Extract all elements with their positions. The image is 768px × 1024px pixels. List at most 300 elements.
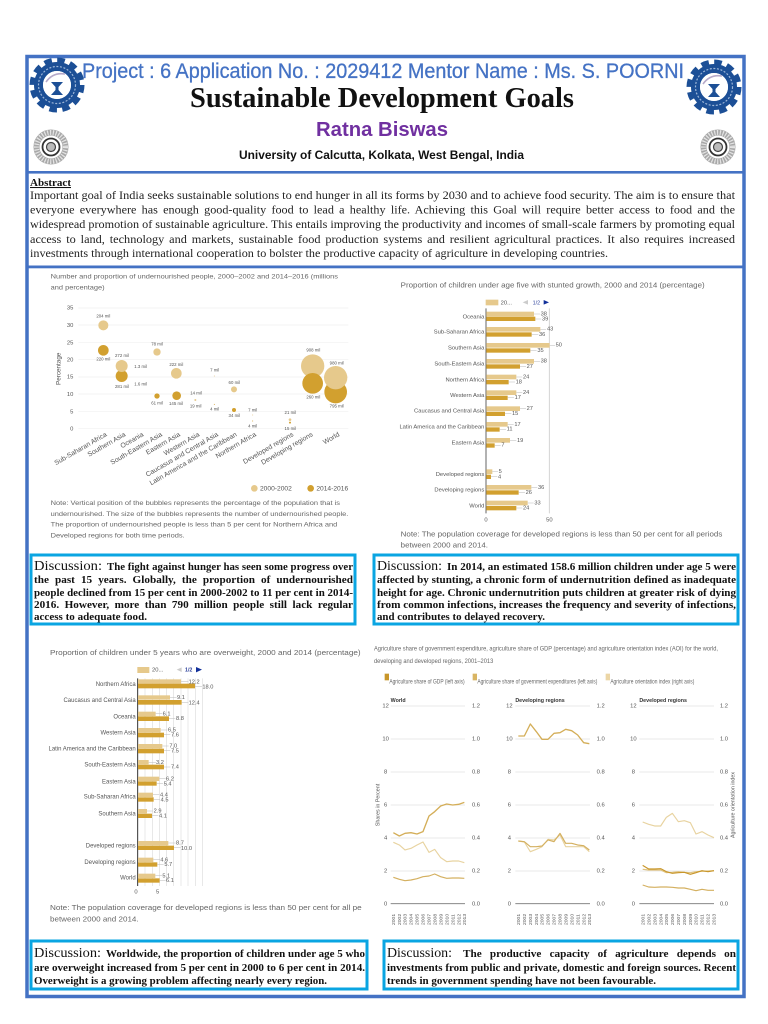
- axis labels: 8: [632, 770, 635, 776]
- year tick labels: 2011: [450, 914, 456, 925]
- panel headings: Developing regions: [515, 698, 565, 704]
- value labels: [147, 679, 213, 884]
- chart note: [401, 531, 723, 550]
- year tick labels: 2008: [682, 914, 688, 925]
- bubble value labels: [96, 314, 344, 431]
- chart title: Proportion of children under age five with stunted growth, 2000 and 2014 (percentage): [401, 283, 705, 290]
- chart note: undernourished. The size of the bubbles represents the number of undernourished people.: [51, 511, 348, 518]
- bubble value labels: 260 mil: [306, 395, 320, 400]
- year tick labels: 2006: [546, 914, 552, 925]
- icon: left university seal: [36, 132, 66, 162]
- value labels: 6.5: [168, 728, 176, 734]
- bubble value labels: 14 mil: [190, 391, 202, 396]
- discussion box 2: [374, 555, 738, 624]
- chart title: Proportion of children under 5 years who are overweight, 2000 and 2014 (percentage): [50, 650, 361, 657]
- axis labels: 1.0: [472, 737, 481, 743]
- value labels: 6.1: [166, 878, 174, 884]
- value labels: 24: [523, 506, 529, 512]
- value labels: 10.0: [181, 846, 192, 852]
- value labels: 4.1: [159, 813, 167, 819]
- bubble value labels: 281 mil: [115, 384, 129, 389]
- value labels: 8.7: [176, 841, 184, 847]
- discussion box 1: the past 15 years. Globally, the proportion of undernourished: [34, 575, 353, 586]
- legend: [251, 485, 348, 493]
- category labels: Eastern Asia: [102, 779, 136, 785]
- axis labels: 0.2: [597, 869, 605, 875]
- value labels: 19: [517, 438, 523, 444]
- legend: Agriculture orientation index (right axis): [610, 680, 694, 686]
- value labels: 7.5: [171, 748, 179, 754]
- year tick labels: 2009: [438, 914, 444, 925]
- category labels: Northern Africa: [445, 377, 485, 383]
- category labels: Latin America and the Caribbean: [399, 425, 484, 431]
- value labels: 8.8: [176, 716, 184, 722]
- legend and pager: [137, 667, 202, 674]
- value labels: 4.5: [161, 797, 169, 803]
- axis labels: 8: [508, 770, 511, 776]
- year tick labels: 2004: [534, 914, 540, 925]
- bubble value labels: 795 mil: [330, 403, 344, 408]
- year tick labels: 2007: [552, 914, 558, 925]
- value labels: 4.4: [160, 792, 168, 798]
- value labels: 7.4: [171, 765, 179, 771]
- chart note: between 2000 and 2014.: [401, 543, 488, 550]
- category labels: Developing regions: [84, 860, 136, 866]
- year tick labels: 2005: [540, 914, 546, 925]
- axis and gridlines: 0: [484, 518, 488, 524]
- chart note: Note: The population coverage for developed regions is less than 50 per cent for all periods: [401, 531, 723, 538]
- developed regions lines: [643, 813, 714, 891]
- category labels: Oceania: [463, 314, 485, 320]
- bubble value labels: 78 mil: [151, 341, 163, 346]
- value labels: 5.1: [162, 873, 170, 879]
- discussion box 1: access to adequate food.: [34, 612, 147, 623]
- category labels: Caucasus and Central Asia: [414, 409, 485, 415]
- value labels: 4.6: [160, 857, 168, 863]
- value labels: 3.2: [156, 760, 164, 766]
- value labels: 2.9: [154, 809, 162, 815]
- axis labels: 4: [508, 836, 512, 842]
- chart title: Agriculture share of government expenditure, agriculture share of GDP (percentage) and agriculture orientation index (AOI) for the world,: [374, 646, 718, 653]
- axis labels: 0.8: [720, 770, 728, 776]
- gridlines: [391, 706, 714, 904]
- axis labels: 10: [630, 737, 637, 743]
- axis labels: 12: [506, 704, 513, 710]
- axis labels: 4: [632, 836, 636, 842]
- category labels: Caucasus and Central Asia: [145, 431, 220, 479]
- bubble value labels: 204 mil: [96, 314, 110, 319]
- icon: right gear logo: [690, 62, 738, 112]
- year tick labels: 2007: [427, 914, 433, 925]
- icon: right university seal: [704, 132, 732, 162]
- discussion box 4: trends in government spending have not been favourable.: [387, 976, 656, 987]
- year tick labels: 2013: [587, 914, 593, 925]
- chart title: developing and developed regions, 2001–2013: [374, 658, 494, 665]
- y axis: 35: [67, 306, 73, 312]
- category labels: Western Asia: [450, 393, 485, 399]
- title: Sustainable Development Goals: [190, 82, 574, 114]
- category labels: Developed regions: [436, 472, 484, 478]
- value labels: 5.4: [164, 781, 172, 787]
- discussion box 3: Discussion:: [34, 946, 101, 961]
- value labels: 33: [534, 500, 541, 506]
- year tick labels: 2003: [652, 914, 658, 925]
- value labels: 36: [538, 485, 544, 491]
- axis labels: 0.6: [720, 803, 728, 809]
- axis and gridlines: [484, 308, 553, 524]
- category labels: World: [120, 876, 136, 882]
- year tick labels: 2007: [676, 914, 682, 925]
- chart note: [50, 905, 362, 923]
- axis labels: 0: [508, 901, 512, 907]
- legend: 2000-2002: [260, 486, 292, 493]
- value labels: 35: [537, 348, 544, 354]
- affiliation: University of Calcutta, Kolkata, West Bengal, India: [239, 148, 524, 162]
- bubble value labels: 908 mil: [306, 348, 320, 353]
- value labels: 18.0: [202, 684, 213, 690]
- chart note: The proportion of undernourished people is less than 5 per cent for Northern Africa and: [51, 522, 338, 529]
- axis labels: 2: [384, 869, 387, 875]
- value labels: 24: [523, 374, 529, 380]
- axis labels: 0.2: [720, 869, 728, 875]
- category labels: Latin America and the Caribbean: [48, 746, 136, 752]
- axis labels: 0.6: [472, 803, 480, 809]
- value labels: 4: [498, 474, 501, 480]
- year tick labels: 2005: [415, 914, 421, 925]
- value labels: 26: [526, 490, 532, 496]
- bubble value labels: 272 mil: [115, 353, 129, 358]
- value labels: 38: [541, 312, 547, 318]
- category labels: Sub-Saharan Africa: [84, 795, 136, 801]
- category labels: Western Asia: [101, 730, 136, 736]
- category labels: Northern Africa: [215, 431, 258, 460]
- value labels: 6.2: [166, 776, 174, 782]
- value labels: [491, 312, 562, 512]
- legend and pager: 1/2: [533, 300, 540, 306]
- value labels: 39: [542, 317, 548, 323]
- chart note: Developed regions for both time periods.: [51, 532, 185, 539]
- year tick labels: 2010: [444, 914, 450, 925]
- axis labels: 0.6: [597, 803, 605, 809]
- year tick labels: 2011: [700, 914, 706, 925]
- category labels: South-Eastern Asia: [110, 431, 164, 467]
- abstract: [30, 178, 736, 260]
- category labels: Southern Asia: [448, 346, 485, 352]
- axis labels: 6: [508, 803, 511, 809]
- panel headings: Developed regions: [639, 698, 687, 704]
- legend: 2014-2016: [316, 486, 348, 493]
- year tick labels: 2002: [522, 914, 528, 925]
- bubble value labels: 7 mil: [248, 407, 257, 412]
- category labels: Western Asia: [163, 431, 201, 457]
- axis and gridlines: 50: [546, 518, 553, 524]
- category labels: South-Eastern Asia: [434, 362, 485, 368]
- axis labels: 1.2: [472, 704, 480, 710]
- header: [32, 60, 738, 162]
- category labels: Developed regions: [242, 431, 295, 466]
- discussion box 1: The fight against hunger has seen some progress over: [107, 562, 353, 573]
- bars: [138, 679, 195, 883]
- value labels: 38: [541, 359, 547, 365]
- category labels: Oceania: [113, 714, 136, 720]
- bubble value labels: 34 mil: [229, 413, 240, 418]
- axis and gridlines: 5: [156, 889, 159, 895]
- value labels: 36: [539, 332, 545, 338]
- bubble value labels: 220 mil: [96, 356, 110, 361]
- value labels: 6.1: [163, 711, 171, 717]
- value labels: 50: [556, 343, 562, 349]
- chart title: Number and proportion of undernourished people, 2000–2002 and 2014–2016 (millions: [51, 273, 338, 280]
- value labels: 11: [507, 427, 513, 433]
- year tick labels: 2003: [528, 914, 534, 925]
- year tick labels: 2012: [456, 914, 462, 925]
- y axis: [56, 306, 348, 432]
- panel headings: World: [391, 698, 406, 704]
- value labels: 17: [514, 422, 521, 428]
- axis labels: 0.4: [597, 836, 605, 842]
- bubble value labels: 60 mil: [229, 380, 240, 385]
- axis labels: 10: [506, 737, 513, 743]
- axis labels: 2: [508, 869, 511, 875]
- year tick labels: 2012: [706, 914, 712, 925]
- bubble value labels: 4 mil: [248, 424, 257, 429]
- year tick labels: 2012: [581, 914, 587, 925]
- abstract text: everyone everywhere has enough good-quality food to lead a healthy life. Achieving this Goal will require better access to food and the: [30, 202, 735, 216]
- discussion box 2: and contributes to delayed recovery.: [377, 612, 545, 623]
- panel: overweight bar chart: [48, 650, 362, 923]
- value labels: 5: [499, 469, 502, 475]
- category labels: Caucasus and Central Asia: [63, 698, 136, 704]
- chart note: Note: Vertical position of the bubbles represents the percentage of the population that is: [51, 500, 341, 507]
- discussion box 2: height for age. Chronic undernutrition puts children at greater risk of dying: [377, 588, 737, 599]
- bubble value labels: 7 mil: [210, 368, 219, 373]
- discussion box 1: 2016. However, more than 790 million people still lack regular: [34, 600, 353, 611]
- bubble value labels: 19 mil: [190, 403, 201, 408]
- axis labels: 8: [384, 770, 387, 776]
- category labels: Southern Asia: [87, 431, 127, 459]
- legend and pager: 20...: [152, 668, 164, 674]
- axis labels: Agriculture orientation index: [730, 772, 736, 838]
- discussion box 1: people declined from 15 per cent in 2000-2002 to 11 per cent in 2014-: [34, 588, 354, 599]
- category labels: World: [322, 431, 341, 446]
- chart title: and percentage): [51, 284, 105, 291]
- year tick labels: 2004: [409, 914, 415, 925]
- discussion box 3: Worldwide, the proportion of children under age 5 who: [106, 949, 365, 960]
- abstract text: access to land, technology and markets, sustainable food production systems and resilient agricultural practices. It also requires increased: [30, 232, 735, 246]
- discussion box 3: [31, 941, 367, 989]
- value labels: 7.0: [169, 744, 177, 750]
- legend: Agriculture share of government expenditures (left axis): [477, 680, 597, 686]
- bubble value labels: 1.6 mil: [134, 381, 147, 386]
- year tick labels: 2001: [391, 914, 397, 925]
- author: Ratna Biswas: [316, 119, 448, 141]
- axis labels: 4: [384, 836, 388, 842]
- year tick labels: 2002: [397, 914, 403, 925]
- developing regions lines: [518, 724, 589, 852]
- axis labels: 0.0: [720, 901, 729, 907]
- value labels: 43: [547, 327, 553, 333]
- axis and gridlines: 0: [134, 889, 138, 895]
- year tick labels: 2008: [432, 914, 438, 925]
- chart note: between 2000 and 2014.: [50, 916, 139, 923]
- year tick labels: 2013: [462, 914, 468, 925]
- chart title: [51, 273, 338, 291]
- category labels: Latin America and the Caribbean: [149, 431, 239, 487]
- abstract heading: Abstract: [30, 178, 72, 189]
- category labels: Oceania: [119, 431, 145, 450]
- discussion box 2: from common infections, increases the frequency and severity of infections,: [377, 600, 736, 611]
- y axis: 0: [70, 426, 74, 432]
- axis labels: 0: [632, 901, 636, 907]
- y axis: 30: [67, 323, 74, 329]
- bubble value labels: 145 mil: [169, 401, 183, 406]
- discussion box 4: Discussion:: [387, 946, 452, 961]
- y axis: 25: [67, 340, 73, 346]
- legend: Agriculture share of GDP (left axis): [389, 680, 465, 686]
- year tick labels: 2009: [688, 914, 694, 925]
- bubble value labels: 222 mil: [169, 362, 183, 367]
- axis labels: 0: [384, 901, 388, 907]
- axis labels: 0.8: [472, 770, 480, 776]
- value labels: 12.4: [189, 700, 200, 706]
- discussion box 2: Discussion:: [377, 559, 442, 574]
- discussion box 1: Discussion:: [34, 559, 102, 574]
- value labels: 9.1: [177, 695, 185, 701]
- category labels: Developing regions: [434, 488, 484, 494]
- year tick labels: 2002: [646, 914, 652, 925]
- legend and pager: 20...: [501, 300, 512, 306]
- category labels: [48, 682, 136, 882]
- year tick labels: 2001: [516, 914, 522, 925]
- y axis: 20: [67, 358, 74, 364]
- category labels: South-Eastern Asia: [84, 763, 136, 769]
- category labels: Eastern Asia: [145, 431, 182, 457]
- axis labels: 12: [630, 704, 637, 710]
- axis labels: 1.2: [720, 704, 728, 710]
- bubble value labels: 980 mil: [330, 360, 344, 365]
- category labels: [399, 314, 485, 509]
- category labels: World: [469, 503, 484, 509]
- year tick labels: 2010: [694, 914, 700, 925]
- y axis: 15: [67, 375, 73, 381]
- year tick labels: 2011: [575, 914, 581, 925]
- axis labels: 10: [382, 737, 390, 743]
- axis labels: 6: [632, 803, 635, 809]
- axis and gridlines: [134, 678, 202, 895]
- year tick labels: [391, 914, 718, 925]
- category labels: Sub-Saharan Africa: [434, 330, 485, 336]
- discussion box 1: [31, 555, 355, 624]
- value labels: 7.6: [171, 732, 179, 738]
- axis labels: 0.4: [720, 836, 729, 842]
- discussion box 2: affected by stunting, a chronic form of undernutrition defined as inadequate: [377, 575, 736, 586]
- category labels: Southern Asia: [98, 811, 136, 817]
- y axis: Percentage: [56, 352, 63, 385]
- legend and pager: 1/2: [185, 668, 192, 674]
- axis labels: 12: [382, 704, 389, 710]
- discussion box 4: investments from public and private, domestic and foreign sources. Recent: [387, 963, 737, 974]
- panel: undernourished bubble chart: [51, 273, 348, 539]
- legend and pager: [486, 300, 549, 306]
- value labels: 18: [516, 379, 522, 385]
- value labels: 27: [527, 406, 533, 412]
- value labels: 15: [512, 411, 518, 417]
- bars: [486, 312, 550, 510]
- bubbles: [98, 320, 347, 424]
- year tick labels: 2004: [658, 914, 664, 925]
- axis labels: Shares in Percent: [375, 783, 381, 826]
- abstract text: investments through international cooperation to bolster the productive capacity of agriculture in developing countries.: [30, 246, 608, 260]
- panel: agriculture line charts: [374, 646, 736, 925]
- category labels: Developing regions: [260, 431, 315, 467]
- world lines: [393, 802, 464, 881]
- axis labels: 0.4: [472, 836, 481, 842]
- category labels: [54, 431, 341, 487]
- bubble value labels: 1.3 mil: [134, 364, 147, 369]
- axis labels: 0.0: [472, 901, 481, 907]
- discussion box 4: The productive capacity of agriculture depends on: [463, 949, 736, 960]
- bubble value labels: 15 mil: [285, 426, 296, 431]
- category labels: Northern Africa: [96, 682, 136, 688]
- bubble value labels: 4 mil: [210, 407, 219, 412]
- y axis: 5: [70, 409, 73, 415]
- panel headings: [391, 698, 687, 704]
- abstract text: [30, 188, 736, 260]
- discussion box 3: are overweight increased from 5 per cent in 2000 to 6 per cent in 2014.: [34, 963, 365, 974]
- abstract text: widespread promotion of sustainable agriculture. This entails improving the productivity and incomes of small-scale farmers by promoting equal: [30, 217, 736, 231]
- bubble value labels: 61 mil: [151, 400, 163, 405]
- year tick labels: 2006: [421, 914, 427, 925]
- category labels: Eastern Asia: [452, 441, 485, 447]
- year tick labels: 2001: [640, 914, 646, 925]
- value labels: 12.2: [189, 679, 200, 685]
- axis labels: 1.0: [720, 737, 729, 743]
- category labels: Developed regions: [86, 843, 136, 849]
- axis labels: [375, 704, 736, 907]
- category labels: Sub-Saharan Africa: [54, 431, 109, 467]
- y axis: 10: [67, 392, 74, 398]
- value labels: 27: [527, 364, 533, 370]
- legend: [385, 674, 694, 686]
- axis labels: 6: [384, 803, 387, 809]
- chart title: [374, 646, 718, 665]
- abstract text: Important goal of India seeks sustainable solutions to end hunger in all its forms by 2030 and to achieve food security. The aim is to ensure that: [30, 188, 736, 202]
- year tick labels: 2013: [712, 914, 718, 925]
- year tick labels: 2005: [664, 914, 670, 925]
- axis labels: 0.8: [597, 770, 605, 776]
- bubble value labels: 21 mil: [285, 410, 296, 415]
- icon: left gear logo: [32, 60, 82, 110]
- axis labels: 0.2: [472, 869, 480, 875]
- panel: stunted growth bar chart: [399, 283, 723, 550]
- chart note: [51, 500, 348, 539]
- project line: Project : 6 Application No. : 2029412 Mentor Name : Ms. S. POORNI: [82, 60, 684, 83]
- value labels: 7: [501, 443, 504, 449]
- chart note: Note: The population coverage for developed regions is less than 50 per cent for all pe: [50, 905, 362, 912]
- year tick labels: 2009: [563, 914, 569, 925]
- discussion box 2: In 2014, an estimated 158.6 million children under age 5 were: [447, 562, 736, 573]
- year tick labels: 2008: [558, 914, 564, 925]
- value labels: 17: [515, 395, 521, 401]
- axis labels: 1.0: [597, 737, 605, 743]
- discussion box 4: [384, 941, 738, 989]
- value labels: 5.7: [164, 862, 172, 868]
- value labels: 24: [523, 390, 529, 396]
- discussion box 3: Overweight is a growing problem affecting nearly every region.: [34, 976, 327, 987]
- year tick labels: 2003: [403, 914, 409, 925]
- axis labels: 1.2: [597, 704, 605, 710]
- year tick labels: 2006: [670, 914, 676, 925]
